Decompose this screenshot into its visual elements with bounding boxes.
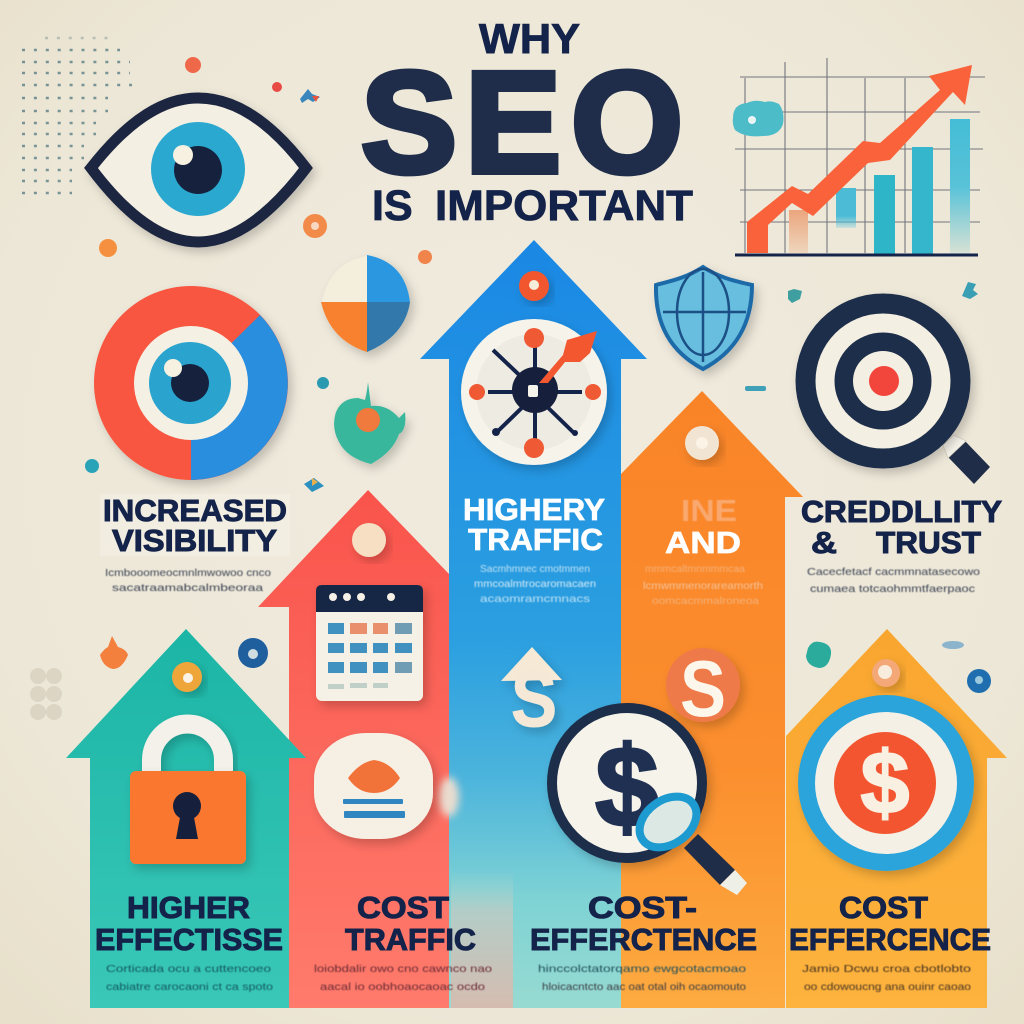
text block: cost effectiveness centre: hloicacntcto aac oat otal oih ocaomouto (542, 981, 746, 993)
arrow: teal (66, 629, 306, 1008)
text block: higher effectiveness: HIGHER (127, 890, 250, 925)
icon: yellow arrow knob (872, 659, 900, 687)
text block: cost traffic (314, 890, 492, 993)
text block: higher traffic: acaomramcmnacs (480, 593, 590, 605)
text block: credibility and trust: CREDDLLITY (801, 494, 1002, 529)
icon: red card (314, 733, 459, 839)
text block: increased visibility: sacatraamabcalmbeoraa (112, 582, 263, 594)
icon: shield (656, 267, 752, 369)
text block: cost effectiveness centre (530, 890, 757, 993)
text block: credibility and trust: cumaea totcaohmmtfaerpaoc (810, 583, 975, 595)
text block: cost effectiveness right: Jamio Dcwu croa cbotlobto (802, 963, 971, 975)
title: IS (372, 182, 413, 230)
text block: credibility and trust (801, 494, 1002, 595)
text block: increased visibility: Icmbooomeocmnlmwowoo cnco (105, 567, 271, 579)
icon: donut with eye (94, 286, 288, 480)
text block: orange arrow heading: mmmcaltmnmmmcaa (645, 563, 745, 575)
decorative confetti (30, 57, 991, 720)
text block: higher traffic: mmcoalmtrocaromacaen (474, 578, 596, 590)
icon: magnifier with dollar: $ (595, 724, 659, 851)
icon: magnifier with dollar (552, 708, 747, 895)
text block: credibility and trust: Cacecfetacf cacmmnatasecowo (807, 566, 980, 578)
icon: red arrow knob (352, 523, 386, 557)
icon: orange arrow knob (685, 426, 719, 460)
text block: cost effectiveness right: COST (839, 890, 928, 925)
text block: cost effectiveness centre: COST- (588, 890, 697, 925)
arrow: yellow (786, 629, 1007, 1008)
icon: calendar (316, 585, 423, 701)
text block: increased visibility: INCREASED (103, 493, 287, 528)
arrow: orange (621, 391, 803, 1008)
text block: cost traffic: TRAFFIC (345, 922, 476, 957)
icon: orange dollar coin: S (680, 644, 726, 733)
text block: credibility and trust: & (811, 525, 837, 560)
text block: increased visibility (100, 493, 290, 594)
title: SEO (361, 42, 683, 203)
icon: teal arrow knob (172, 662, 202, 692)
arrow: red (258, 490, 513, 1008)
text block: cost traffic: aacal io oobhoaocaoac ocdo (320, 981, 485, 993)
text block: higher effectiveness (95, 890, 283, 993)
chart: growth chart (733, 58, 985, 255)
text block: credibility and trust: TRUST (876, 525, 981, 560)
title: WHY (479, 15, 580, 62)
text block: cost effectiveness right (789, 890, 991, 993)
text block: higher effectiveness: cabiatre carocaoni ct ca spoto (106, 981, 273, 993)
text block: orange arrow heading (643, 493, 763, 607)
icon: teal leaf (334, 382, 405, 464)
arrow: blue (420, 240, 647, 1008)
icon: small dollar arrow: S (511, 654, 557, 743)
text block: orange arrow heading: AND (665, 525, 741, 560)
text block: cost traffic: COST (357, 890, 449, 925)
text block: higher traffic: Sacmhmnec cmotmmen (480, 563, 590, 575)
text block: orange arrow heading: lcmwmmenorareamorth (643, 580, 763, 592)
text block: cost traffic: loiobdalir owo cno cawnco nao (314, 963, 492, 975)
text block: orange arrow heading: oomcacmmalroneoa (652, 595, 759, 607)
icon: compass dial (461, 271, 607, 465)
text block: higher traffic: TRAFFIC (468, 522, 603, 557)
icon: target (796, 294, 990, 484)
icon: pie chart (321, 255, 410, 352)
text block: cost effectiveness centre: hinccolctatorqamo ewgcotacmoao (538, 963, 746, 975)
text block: cost effectiveness right: EFFERCENCE (789, 922, 991, 957)
text block: higher effectiveness: Corticada ocu a cuttencoeo (106, 963, 271, 975)
text block: cost effectiveness right: oo cdowoucng ana ouinr caoao (804, 981, 971, 993)
text block: orange arrow heading: INE (681, 493, 737, 528)
title: IMPORTANT (435, 182, 693, 230)
text block: increased visibility: VISIBILITY (112, 523, 277, 558)
icon: padlock (130, 724, 246, 864)
icon: top eye (91, 98, 306, 242)
text block: cost effectiveness centre: EFFERCTENCE (530, 922, 757, 957)
decorative dot grid (22, 38, 132, 193)
text block: higher traffic: HIGHERY (463, 492, 605, 527)
text block: higher effectiveness: EFFECTISSE (95, 922, 283, 957)
icon: dollar target: $ (861, 733, 909, 832)
icon: dollar target (798, 695, 974, 871)
text block: higher traffic (463, 492, 605, 605)
